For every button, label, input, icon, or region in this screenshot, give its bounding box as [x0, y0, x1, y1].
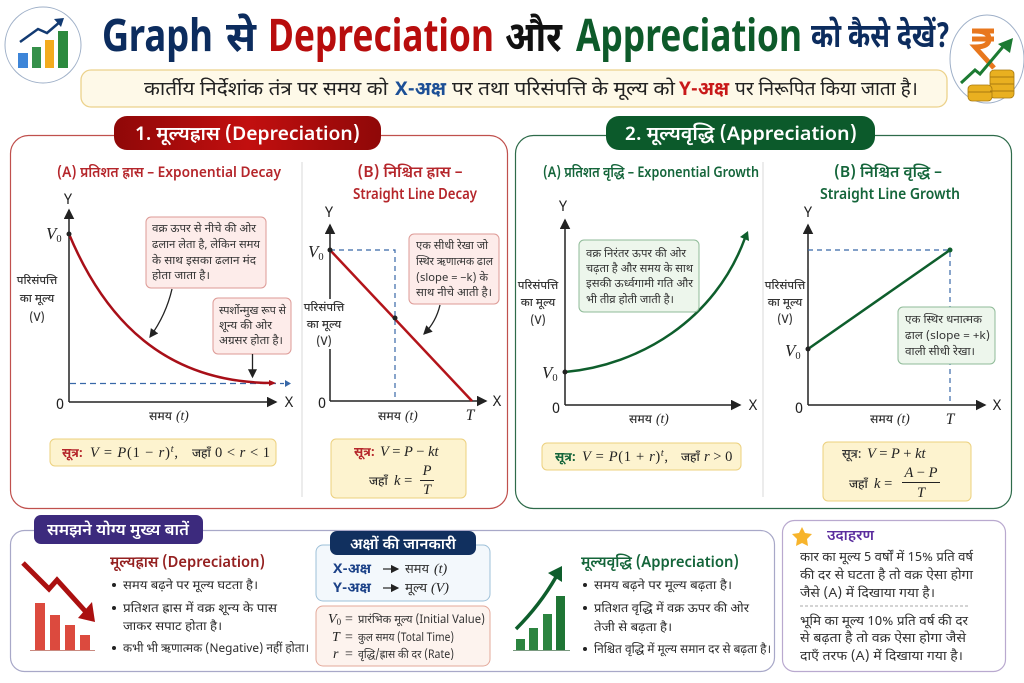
heading: appreciation pill: 2. मूल्यवृद्धि (Appreciation)	[625, 123, 857, 148]
box: symbol definitions: r	[333, 647, 339, 662]
box: symbol definitions: =	[345, 630, 353, 645]
box: axis info: (t)	[434, 562, 448, 577]
heading: appreciation pill	[606, 116, 875, 150]
formula: linear decay: T	[423, 482, 432, 498]
title: को कैसे देखें?	[811, 16, 950, 61]
chart: exponential growth: (t)	[656, 411, 669, 426]
arrow: to line	[424, 305, 440, 334]
formula: decay: V = P(1 − r)	[90, 445, 170, 461]
chart: straight line growth: का मूल्य	[768, 296, 803, 311]
chart: exponential growth: V	[542, 363, 552, 382]
callout: linear decay note: साथ नीचे आती है।	[416, 286, 492, 301]
chart: exponential decay: V	[46, 224, 56, 243]
chart: exponential decay: का मूल्य	[20, 292, 55, 307]
chart: straight line decay: परिसंपत्ति	[304, 301, 345, 316]
chart: exponential decay: 0	[56, 396, 64, 415]
panel: depreciation	[10, 116, 508, 508]
chart: exponential growth: समय	[629, 412, 653, 428]
callout: linear decay note: स्थिर ऋणात्मक ढाल	[416, 255, 494, 270]
panel: appreciation	[516, 116, 1012, 508]
formula: linear decay: जहाँ	[369, 473, 389, 490]
formula: linear growth	[823, 442, 971, 501]
box: symbol definitions: प्रारंभिक मूल्य (Initial Value)	[358, 613, 485, 628]
callout: asymptote note: स्पर्शोन्मुख रूप से	[219, 304, 287, 319]
box: symbol definitions: =	[345, 647, 353, 662]
box: symbol definitions: =	[345, 612, 353, 627]
text: depreciation points: मूल्यह्रास (Depreciation)	[110, 553, 265, 574]
chart: straight line decay: (V)	[316, 335, 332, 350]
chart: straight line decay: V	[308, 242, 318, 261]
subtitle banner: पर तथा परिसंपत्ति के मूल्य को	[452, 77, 676, 103]
callout: asymptote note	[213, 298, 291, 354]
formula: linear decay	[331, 439, 466, 498]
callout: slope note: के साथ इसका ढलान मंद	[152, 254, 256, 269]
chart: straight line growth: (V)	[777, 313, 793, 328]
chart: straight line decay: (t)	[405, 408, 418, 423]
arrow: to curve	[150, 289, 172, 337]
text: appreciation points: प्रतिशत वृद्धि में वक्र ऊपर की ओर	[594, 600, 750, 617]
text: appreciation points: मूल्यवृद्धि (Appreciation)	[581, 553, 739, 574]
icon: rising bars	[513, 566, 570, 650]
callout: linear decay note: एक सीधी रेखा जो	[416, 239, 488, 254]
formula: decay: जहाँ	[192, 445, 212, 462]
callout: slope note: ढलान लेता है, लेकिन समय	[152, 238, 261, 253]
formula: growth: r > 0	[704, 449, 732, 465]
callout: slope note	[146, 217, 266, 288]
box: axis info: (V)	[431, 581, 449, 596]
chart: exponential growth: X	[749, 397, 758, 416]
formula: growth: सूत्र:	[555, 451, 576, 467]
icon: star	[792, 527, 812, 546]
chart: straight line decay: T	[466, 407, 476, 424]
formula: decay: 0 < r < 1	[215, 445, 270, 461]
box: axis info: X-अक्ष	[333, 561, 371, 579]
callout: slope note: वक्र ऊपर से नीचे की ओर	[152, 222, 257, 237]
formula: decay: सूत्र:	[62, 447, 83, 463]
heading: A exponential decay: (A) प्रतिशत ह्रास – Exponential Decay	[57, 164, 281, 183]
box: symbol definitions: V	[328, 612, 337, 627]
box: axis info: समय	[405, 562, 429, 579]
chart: straight line growth: X	[993, 397, 1002, 416]
chart: straight line growth: Y	[804, 204, 813, 223]
callout: asymptote note: शून्य की ओर	[219, 319, 273, 334]
box: axis info: मूल्य	[405, 581, 427, 598]
heading: B straight line growth: (B) निश्चित वृद्धि –	[834, 164, 942, 184]
formula: linear decay: P	[422, 463, 432, 479]
heading: B straight line decay	[353, 164, 478, 206]
formula: linear decay: V = P − kt	[380, 444, 440, 460]
heading: depreciation pill: 1. मूल्यह्रास (Depreciation)	[135, 123, 360, 148]
heading: B straight line decay: (B) निश्चित ह्रास –	[358, 164, 462, 184]
chart: straight line growth: T	[946, 411, 956, 428]
box: symbol definitions: कुल समय (Total Time)	[358, 631, 454, 646]
callout: linear decay note	[409, 234, 499, 304]
formula: growth: जहाँ	[681, 449, 701, 466]
title: से	[226, 13, 257, 69]
text: example lines: जैसे (A) में दिखाया गया है।	[800, 585, 935, 603]
chart: exponential growth: का मूल्य	[521, 296, 556, 311]
chart: exponential decay	[17, 191, 294, 425]
box: symbol definitions	[316, 606, 490, 666]
formula: linear growth: A − P	[904, 465, 938, 481]
chart: straight line growth: 0	[795, 351, 801, 362]
subtitle banner: Y-अक्ष	[679, 78, 730, 103]
text: example lines: कार का मूल्य 5 वर्षों में 15% प्रति वर्ष	[800, 549, 974, 567]
formula: decay	[50, 439, 276, 466]
chart: straight line decay: X	[493, 393, 502, 412]
formula: linear decay: सूत्र:	[354, 446, 375, 462]
formula: linear growth: सूत्र:	[842, 448, 862, 464]
chart: exponential growth: (V)	[530, 314, 546, 329]
chart: exponential decay: समय	[149, 409, 173, 425]
text: depreciation points: कभी भी ऋणात्मक (Negative) नहीं होता।	[123, 640, 309, 657]
chart: exponential growth: परिसंपत्ति	[518, 279, 559, 294]
chart: exponential decay: Y	[64, 191, 73, 210]
subtitle banner: पर निरूपित किया जाता है।	[735, 77, 918, 103]
chart: exponential growth: Y	[559, 198, 568, 217]
box: axis info	[316, 531, 490, 601]
chart: exponential growth: 0	[552, 373, 558, 384]
formula: growth: ,	[664, 449, 668, 465]
chart: straight line growth	[765, 204, 1002, 428]
formula: growth	[542, 443, 741, 470]
callout: asymptote note: अग्रसर होता है।	[219, 334, 283, 349]
box: symbol definitions: 0	[337, 617, 342, 627]
title: Depreciation	[268, 12, 494, 70]
box: axis info: Y-अक्ष	[333, 580, 371, 598]
callout: linear growth note: एक स्थिर धनात्मक	[905, 313, 983, 328]
chart: straight line decay: 0	[318, 395, 326, 414]
callout: growth note: चढ़ता है और समय के साथ	[586, 262, 694, 277]
box: symbol definitions: T	[332, 630, 341, 645]
chart: straight line decay: Y	[325, 204, 334, 223]
formula: decay: ,	[174, 445, 178, 461]
chart: exponential growth: 0	[552, 400, 560, 419]
heading: key points pill: समझने योग्य मुख्य बातें	[47, 520, 190, 542]
text: example lines: से बढ़ता है तो वक्र ऐसा होगा जैसे	[800, 630, 967, 648]
heading: B straight line growth: Straight Line Growth	[820, 187, 960, 206]
box: symbol definitions: वृद्धि/ह्रास की दर (Rate)	[358, 647, 454, 663]
chart: exponential decay: परिसंपत्ति	[17, 274, 58, 289]
icon: falling bars	[23, 563, 95, 650]
chart: straight line growth: V	[785, 341, 795, 360]
heading: B straight line decay: Straight Line Decay	[353, 187, 478, 206]
heading: example: उदाहरण	[827, 527, 875, 546]
callout: growth note: इसकी ऊर्ध्वगामी गति और	[586, 277, 694, 292]
formula: decay: t	[171, 444, 174, 455]
title	[102, 12, 950, 70]
heading: B straight line growth	[820, 164, 960, 206]
text: appreciation points: समय बढ़ने पर मूल्य बढ़ता है।	[594, 577, 732, 594]
heading: key points pill	[34, 515, 203, 544]
box: axis info: अक्षों की जानकारी	[350, 535, 457, 556]
chart: exponential decay: X	[285, 394, 294, 413]
panel: example	[782, 520, 1006, 672]
formula: linear growth: जहाँ	[849, 476, 869, 493]
callout: linear decay note: (slope = −k) के	[416, 271, 489, 286]
callout: growth note: वक्र निरंतर ऊपर की ओर	[586, 247, 687, 262]
chart: straight line decay: समय	[378, 409, 402, 425]
subtitle banner	[81, 70, 947, 107]
title: Appreciation	[576, 12, 802, 70]
arrow: to asymptote	[252, 354, 254, 377]
text: depreciation points: जाकर सपाट होता है।	[123, 618, 222, 635]
callout: growth note	[579, 240, 699, 312]
chart: straight line decay	[304, 204, 502, 425]
chart: straight line decay: का मूल्य	[307, 318, 342, 333]
text: appreciation points: निश्चित वृद्धि में मूल्य समान दर से बढ़ता है।	[594, 641, 771, 658]
title: और	[505, 14, 563, 69]
callout: linear growth note: ढाल (slope = +k)	[905, 330, 990, 344]
text: example lines: की दर से घटता है तो वक्र ऐसा होगा	[800, 567, 974, 585]
chart: straight line growth: समय	[870, 412, 894, 428]
formula: linear growth: V = P + kt	[867, 446, 927, 462]
formula: growth: t	[661, 448, 664, 459]
chart: exponential decay: (t)	[176, 408, 189, 423]
callout: growth note: भी तीव्र होती जाती है।	[586, 293, 674, 308]
text: example lines: भूमि का मूल्य 10% प्रति वर्ष की दर	[800, 613, 969, 631]
chart: straight line growth: परिसंपत्ति	[765, 279, 806, 294]
chart: exponential decay: (V)	[29, 311, 45, 326]
chart: straight line growth: 0	[795, 400, 803, 419]
text: example lines	[800, 549, 974, 666]
text: depreciation points: प्रतिशत ह्रास में वक्र शून्य के पास	[123, 600, 278, 617]
text: appreciation points: तेजी से बढ़ता है।	[594, 619, 672, 636]
icon: bar chart logo	[5, 7, 81, 83]
chart: exponential growth	[518, 198, 758, 428]
formula: linear growth: T	[917, 485, 926, 501]
chart: straight line growth: (t)	[897, 411, 910, 426]
text: depreciation points: समय बढ़ने पर मूल्य घटता है।	[123, 577, 258, 594]
callout: linear growth note: वाली सीधी रेखा।	[905, 345, 975, 360]
subtitle banner: कार्तीय निर्देशांक तंत्र पर समय को	[144, 77, 389, 103]
formula: linear decay: k =	[394, 473, 412, 489]
chart: exponential decay: 0	[56, 234, 62, 245]
callout: linear growth note	[898, 307, 995, 364]
panel: key points	[10, 515, 774, 672]
formula: linear growth: k =	[874, 476, 892, 492]
subtitle banner: X-अक्ष	[395, 78, 447, 103]
chart: straight line decay: 0	[318, 252, 324, 263]
icon: rupee and coins	[950, 15, 1024, 103]
heading: depreciation pill	[114, 116, 381, 150]
text: depreciation points	[110, 553, 309, 657]
text: appreciation points	[581, 553, 771, 658]
text: example lines: दाएँ तरफ (A) में दिखाया गया है।	[800, 648, 963, 666]
title: Graph	[102, 12, 213, 70]
formula: growth: V = P(1 + r)	[582, 449, 660, 465]
callout: slope note: होता जाता है।	[152, 269, 210, 284]
heading: A exponential growth: (A) प्रतिशत वृद्धि – Exponential Growth	[543, 164, 759, 183]
